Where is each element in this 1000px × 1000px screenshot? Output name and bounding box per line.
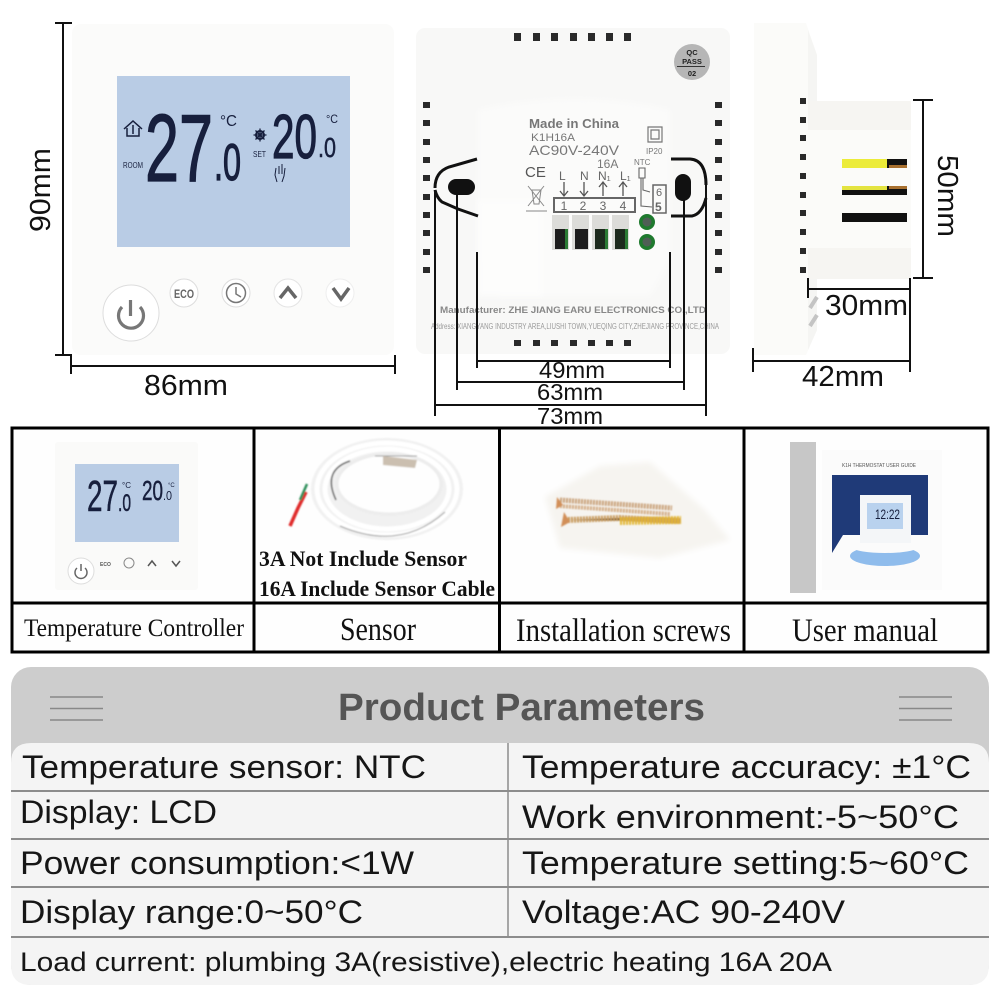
row 2 — [20, 794, 959, 835]
dimension: 50mm: 50mm — [931, 155, 963, 237]
slots: bottom row — [514, 340, 631, 346]
terminal labels: 6 — [656, 187, 662, 199]
QC pass sticker — [674, 44, 710, 80]
LCD screen: .0 — [318, 132, 336, 163]
item: screws image — [545, 462, 730, 558]
item: temperature controller image: 20 — [142, 475, 163, 506]
terminal labels: 2 — [580, 199, 587, 213]
icon: left menu lines — [50, 697, 103, 720]
terminal blocks — [552, 214, 655, 250]
row 5: load current: Load current: plumbing 3A(resistive),electric heating 16A 20A — [20, 947, 832, 977]
dimension: 90mm — [25, 23, 72, 355]
row 3: Power consumption:<1W — [20, 845, 415, 881]
recycling bin mark — [526, 186, 547, 211]
item: temperature controller image: °C — [122, 481, 131, 490]
terminal labels: 4 — [620, 199, 627, 213]
button: ECO — [170, 279, 198, 307]
product label text: IP20 — [646, 147, 663, 156]
address text: Address: XIANGYANG INDUSTRY AREA,LIUSHI TOWN,YUEQING CITY,ZHEJIANG PROVINCE,CHINA — [431, 322, 720, 331]
terminal labels: N₁ — [598, 169, 611, 183]
LCD screen: °C — [220, 113, 237, 130]
item: user manual image: K1H THERMOSTAT USER GUIDE — [842, 463, 916, 469]
dimension: 30mm — [808, 278, 910, 322]
product label text: Made in China — [529, 116, 620, 131]
button: down — [326, 279, 354, 307]
product label text: CE — [525, 164, 546, 181]
LCD screen — [117, 76, 350, 247]
item: temperature controller image: 27 — [87, 472, 118, 521]
row 4 — [20, 894, 846, 930]
row 1: Temperature sensor: NTC — [22, 749, 426, 785]
icon: hand — [275, 164, 285, 182]
item: user manual image — [790, 442, 942, 593]
package contents table — [12, 428, 988, 652]
QC pass sticker: PASS — [682, 57, 702, 66]
LCD screen: .0 — [214, 134, 241, 192]
IP20 square mark — [648, 127, 662, 142]
LCD screen: 20 — [272, 103, 317, 172]
dimension: 63mm: 63mm — [537, 379, 603, 405]
dimension: 90mm: 90mm — [25, 148, 57, 232]
slots: left column — [423, 102, 430, 273]
item: temperature controller image: ECO — [100, 562, 111, 568]
mounting holes — [448, 174, 691, 201]
parameter table — [11, 743, 989, 985]
terminal labels — [554, 168, 666, 214]
sensor note — [259, 546, 495, 601]
row 3: Temperature setting:5~60°C — [522, 845, 969, 881]
icon: right menu lines — [899, 697, 952, 720]
LCD screen: ROOM — [123, 161, 143, 170]
dimension: 49mm — [477, 252, 670, 383]
terminal openings — [842, 159, 907, 222]
dimension: 50mm — [913, 100, 963, 278]
vent slits — [810, 297, 817, 326]
dimension: 42mm: 42mm — [802, 361, 884, 393]
QC pass sticker: QC — [686, 48, 698, 57]
dimension: 86mm — [71, 355, 395, 402]
panel: product parameters — [11, 667, 989, 985]
row 1 — [22, 749, 971, 785]
row 2: Work environment:-5~50°C — [522, 799, 959, 835]
item: temperature controller image: .0 — [163, 488, 172, 503]
terminal labels: L₁ — [620, 169, 631, 183]
button: ECO: ECO — [174, 287, 194, 301]
dimension: 49mm: 49mm — [539, 357, 605, 383]
icon: sun — [254, 128, 266, 142]
item: sensor cable image — [290, 438, 463, 540]
row 3 — [20, 845, 969, 881]
manufacturer text: Manufacturer: ZHE JIANG EARU ELECTRONICS CO.,LTD — [440, 305, 706, 316]
button: clock — [222, 279, 250, 307]
product label text: AC90V-240V — [529, 142, 620, 158]
product label text: NTC — [634, 158, 651, 167]
caption: sensor: Sensor — [340, 612, 416, 648]
sensor note: 3A Not Include Sensor — [259, 546, 467, 571]
terminal labels: 1 — [561, 199, 568, 213]
terminal labels: N — [580, 169, 589, 183]
side slots — [800, 98, 806, 273]
item: temperature controller image — [55, 442, 198, 590]
row 2: Display: LCD — [20, 794, 217, 830]
product label text — [525, 116, 663, 181]
dimension: 30mm: 30mm — [825, 290, 908, 322]
item: user manual image: 12:22 — [875, 506, 900, 522]
row 1: Temperature accuracy: ±1°C — [522, 749, 971, 785]
QC pass sticker: 02 — [688, 69, 696, 78]
dimension: 63mm — [457, 187, 684, 405]
slots: right column — [715, 102, 722, 273]
terminal labels: 5 — [655, 200, 662, 214]
product label text: 16A — [597, 157, 618, 171]
caption: temperature controller: Temperature Controller — [24, 615, 245, 642]
row 4: Voltage:AC 90-240V — [522, 894, 846, 930]
button: up — [274, 279, 302, 307]
LCD screen: 27 — [145, 95, 213, 202]
dimension: 73mm — [435, 159, 706, 429]
item: temperature controller image: °C — [168, 483, 175, 489]
item: temperature controller image: .0 — [118, 490, 131, 517]
sensor note: 16A Include Sensor Cable — [259, 576, 495, 601]
row 4: Display range:0~50°C — [20, 894, 363, 930]
table grid — [12, 428, 988, 652]
product label text: K1H16A — [531, 132, 576, 144]
LCD screen: °C — [326, 112, 338, 126]
terminal labels: L — [559, 169, 566, 183]
dimension: 42mm — [753, 278, 910, 393]
panel: thermostat back view — [416, 28, 730, 354]
heading: Product Parameters — [338, 687, 705, 729]
LCD screen: SET — [253, 150, 266, 159]
dimension: 73mm: 73mm — [537, 403, 603, 429]
dimension: 86mm: 86mm — [144, 370, 228, 402]
caption: installation screws: Installation screws — [516, 613, 731, 649]
panel: thermostat side view — [754, 23, 911, 355]
button: power — [103, 285, 159, 341]
terminal labels: 3 — [600, 199, 607, 213]
panel: thermostat front view — [72, 24, 394, 355]
slots: top row — [514, 33, 631, 41]
icon: house — [124, 121, 142, 136]
caption: user manual: User manual — [792, 613, 938, 649]
